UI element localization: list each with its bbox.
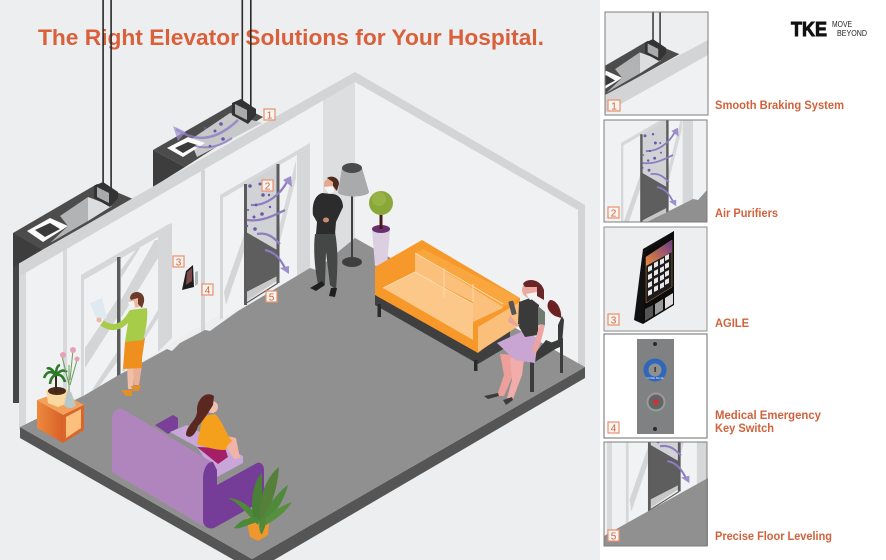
panel 2: air purifiers — [604, 120, 708, 222]
man with mask — [310, 177, 343, 297]
AGILE panel on wall — [182, 265, 198, 290]
woman standing with clipboard — [90, 292, 147, 396]
marker 3: 3 — [176, 258, 182, 268]
woman seated on chair — [484, 280, 564, 405]
marker 3 — [173, 256, 184, 268]
background panel — [0, 0, 600, 560]
elevator shaft 2 with air purifier — [153, 0, 263, 187]
panel 3: AGILE touch screen — [604, 227, 707, 331]
label: Air Purifiers: Air Purifiers — [715, 208, 778, 220]
logo: TKE Move Beyond: BEYOND — [837, 29, 867, 38]
room walls — [19, 72, 585, 430]
panel 3: AGILE touch screen: 3 — [611, 316, 617, 326]
marker 1: 1 — [267, 110, 273, 122]
logo: TKE Move Beyond — [791, 19, 867, 41]
marker 2 — [262, 180, 273, 192]
marker 5 — [266, 291, 277, 304]
elevator door 1 — [81, 223, 172, 397]
panel 5: precise floor leveling: 5 — [611, 532, 617, 542]
marker 1 — [264, 109, 275, 122]
label: Precise Floor Leveling: Precise Floor Leveling — [715, 531, 832, 543]
label: Medical Emergency Key Switch — [715, 410, 822, 435]
label: Medical Emergency Key Switch: Medical Emergency — [715, 410, 822, 422]
left dark shaft edge — [13, 233, 19, 403]
panel 1: smooth braking system — [604, 12, 708, 116]
wall top band over shafts — [20, 72, 355, 276]
label: Smooth Braking System: Smooth Braking System — [715, 100, 844, 112]
isometric lobby scene — [13, 0, 585, 560]
label: Medical Emergency Key Switch: Key Switch — [715, 423, 774, 435]
title: The Right Elevator Solutions for Your Hospital. — [38, 25, 544, 50]
label: AGILE: AGILE — [715, 318, 749, 330]
floor lamp — [338, 163, 369, 267]
panel 4: medical emergency key switch — [604, 334, 707, 438]
purple sofa — [112, 408, 264, 528]
panel 4: medical emergency key switch: CODE BLUE — [646, 376, 664, 380]
panel 5: precise floor leveling — [604, 442, 708, 546]
logo: TKE Move Beyond: TKE — [791, 19, 827, 41]
panel 4: medical emergency key switch: 4 — [611, 424, 617, 434]
floor — [20, 238, 585, 559]
elevator door 2 with purifier air flow — [220, 143, 310, 320]
floor edge — [20, 367, 585, 560]
elevator shaft 1 — [13, 0, 133, 267]
woman seated on purple sofa — [186, 394, 240, 464]
logo: TKE Move Beyond: MOVE — [832, 20, 852, 29]
marker 4: 4 — [205, 286, 211, 296]
marker 2: 2 — [265, 182, 271, 192]
orange sofa — [375, 240, 520, 371]
flower vase on table — [60, 347, 80, 408]
topiary plant — [369, 191, 393, 266]
potted floor plant — [228, 467, 292, 541]
side table — [37, 392, 84, 443]
marker 4 — [202, 284, 213, 296]
panel 1: smooth braking system: 1 — [611, 102, 617, 112]
panel 2: air purifiers: 2 — [611, 208, 617, 220]
marker 5: 5 — [269, 292, 275, 304]
potted palm on table — [44, 365, 68, 407]
